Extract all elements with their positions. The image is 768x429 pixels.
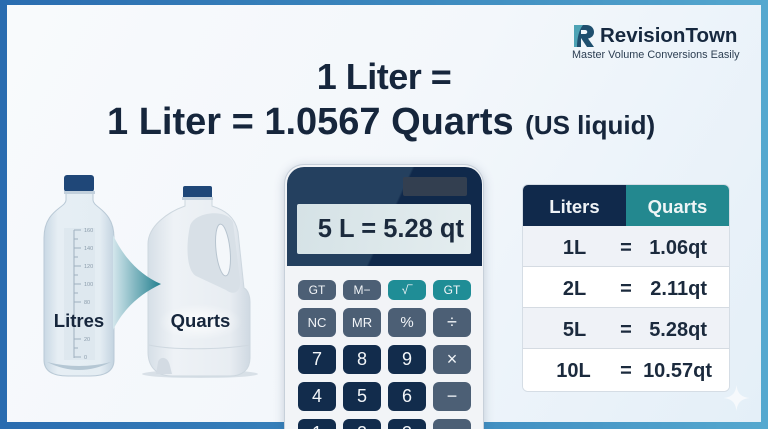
calculator buttons: 7 [312,349,322,369]
calculator display [297,204,471,254]
row 2: 2L [563,278,586,300]
calculator display: 5 L = 5.28 qt [318,215,464,243]
row 3: 5.28qt [649,319,707,341]
calculator buttons: 4 [312,386,322,406]
calculator buttons: 5 [357,386,367,406]
row 1: = [620,237,632,259]
row 2: 2.11qt [650,278,707,300]
calculator buttons: GT [309,283,325,297]
icon: litre bottle: 80 [84,300,90,306]
icon: sparkle [725,386,748,410]
row 4: 10.57qt [643,360,712,382]
calculator head [287,167,482,266]
row 3: = [620,319,632,341]
icon: litre bottle: 120 [84,264,93,270]
row 3: 5L [563,319,586,341]
row 4: = [620,360,632,382]
icon: litre bottle: 140 [84,246,93,252]
illustration: bottle to jug [44,175,258,378]
brand name: RevisionTown [600,24,737,47]
table header: Quarts [626,185,729,226]
title [107,56,655,143]
calculator buttons: × [447,349,457,369]
calculator buttons: GT [444,283,460,297]
calculator buttons: 9 [402,349,412,369]
calculator buttons [298,280,471,429]
table header: Quarts: Quarts [648,196,707,217]
row 4: 10L [556,360,591,382]
calculator buttons: % [400,314,414,331]
row 1: 1.06qt [649,237,707,259]
row 1 [523,226,729,267]
icon: litre bottle [44,175,114,376]
table header: Liters: Liters [549,196,600,217]
row 4 [523,349,729,391]
row 3 [523,308,729,349]
shadow [142,370,258,378]
calculator buttons: − [447,386,457,406]
solar panel [403,177,467,196]
calculator buttons: MR [352,315,372,330]
calculator buttons: M− [353,283,370,297]
calculator buttons: √‾ [402,283,412,297]
calculator buttons: 6 [402,386,412,406]
calculator buttons: 8 [357,349,367,369]
table header: Liters [523,185,626,226]
calculator buttons: ÷ [447,312,457,332]
label: Quarts: Quarts [171,310,230,331]
icon: litre bottle: 100 [84,282,93,288]
icon: litre bottle: 20 [84,337,90,343]
title line 1: 1 Liter = [317,56,451,97]
row 1: 1L [563,237,586,259]
calculator buttons: NC [308,315,326,330]
tagline: Master Volume Conversions Easily [572,49,740,61]
icon: R logo [574,25,594,47]
icon: quart jug [148,186,250,376]
icon: litre bottle: 160 [84,228,93,234]
arrow [113,235,161,330]
label: Litres: Litres [54,310,104,331]
icon: litre bottle: 0 [84,355,87,361]
logo: RevisionTown [572,24,740,61]
row 2: = [620,278,632,300]
title line 2: 1 Liter = 1.0567 Quarts (US liquid) [107,101,655,143]
label glow [158,304,242,340]
calculator [284,164,484,429]
conversion table [523,185,729,391]
row 2 [523,267,729,308]
